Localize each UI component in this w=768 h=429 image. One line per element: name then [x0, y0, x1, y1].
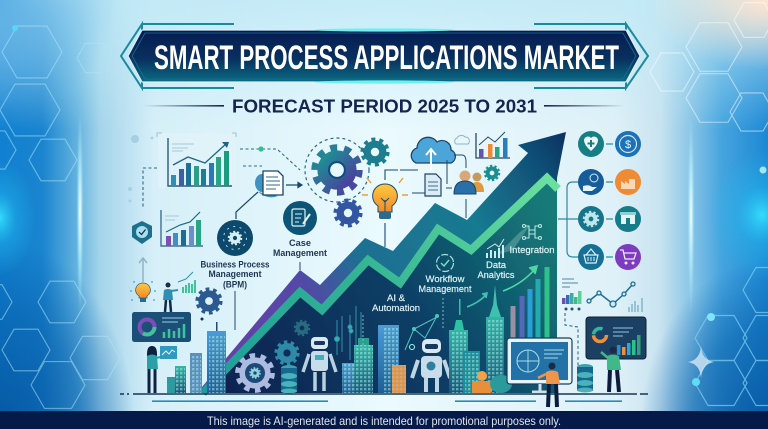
ground line: [120, 393, 648, 395]
icon: healthcare: [578, 131, 604, 157]
thin chart lines: [334, 306, 361, 360]
lower accents: [152, 400, 622, 402]
icon: cart: [615, 244, 641, 270]
arrow up left: [139, 258, 147, 282]
labels in arrow: Data: [486, 260, 507, 271]
icon: retail building: [615, 206, 641, 232]
footer disclaimer: This image is AI-generated and is intended for promotional purposes only.: [207, 414, 561, 428]
people icon: [454, 170, 484, 194]
left scene: bulb: [130, 281, 156, 302]
person green: [601, 346, 621, 392]
main growth arrow: [197, 132, 566, 393]
label: case management: [273, 238, 327, 258]
dashed link to panel: [565, 313, 578, 367]
icon: data analytics: [487, 239, 504, 258]
network lines: [405, 314, 438, 350]
dashboard panel right: [586, 317, 646, 359]
connector to BPM: [236, 192, 258, 219]
small gears and database in arrow: [276, 342, 298, 364]
chart icon top right: [476, 132, 510, 158]
database: [281, 365, 297, 394]
labels in arrow: Integration: [510, 245, 554, 256]
icon: integration: [522, 224, 542, 240]
robot two: [412, 339, 450, 392]
footer disclaimer: [0, 411, 768, 429]
doc icon center: [425, 174, 441, 196]
labels in arrow: Workflow: [426, 274, 465, 285]
city towers right: [449, 285, 504, 393]
person orange: [538, 362, 560, 407]
database right: [577, 364, 593, 392]
left scene: dashboard: [132, 312, 191, 342]
shield icon: [132, 221, 152, 244]
document icon: [255, 171, 283, 197]
small gear teal right: [485, 166, 499, 180]
robot one: [303, 337, 336, 391]
title banner: [121, 24, 648, 88]
mini chart right: [562, 279, 582, 310]
icon: settings: [578, 206, 604, 232]
connector case to arrow: [235, 262, 300, 330]
subtitle: FORECAST PERIOD 2025 TO 2031: [232, 96, 537, 116]
small gear blue: [336, 201, 360, 225]
big gear: [315, 148, 359, 192]
connectors around cloud: [400, 155, 466, 218]
icon: finance: [615, 131, 641, 157]
labels in arrow: [372, 245, 554, 314]
labels in arrow: AI &: [387, 293, 406, 304]
left scene: mini growth chart: [178, 272, 195, 293]
icon: case management: [283, 201, 317, 235]
left scene: woman: [147, 346, 165, 393]
pale bars right: [629, 298, 642, 312]
icon: services hand: [578, 169, 604, 195]
label: case management: Case: [289, 238, 311, 248]
left scene: small chart card: [160, 346, 177, 359]
icon: lightbulb: [362, 178, 408, 219]
seated person: [472, 371, 512, 393]
labels in arrow: Automation: [372, 303, 420, 314]
icon: manufacturing: [615, 169, 641, 195]
small gear teal: [363, 140, 387, 164]
dots left: [128, 135, 153, 202]
icon: finance: $: [625, 139, 631, 151]
icon: basket: [578, 244, 604, 270]
monitor: [507, 338, 572, 392]
labels in arrow: Analytics: [478, 270, 515, 281]
green trend arrows: [467, 266, 537, 307]
label: BPM: (BPM): [223, 280, 247, 290]
left scene: gear: [198, 290, 220, 312]
large bar chart top left: [157, 133, 236, 188]
dashed connectors: [143, 138, 369, 208]
connectors from bulb: [385, 170, 398, 247]
cloud icon: [411, 137, 455, 170]
label: BPM: [200, 260, 270, 290]
label: BPM: Business Process: [200, 260, 270, 270]
label: case management: Management: [273, 248, 327, 258]
left scene: buildings: [167, 322, 226, 393]
label: BPM: Management: [208, 269, 262, 279]
small cloud: [455, 135, 469, 144]
left scene: standing man: [163, 282, 178, 312]
icon: BPM: [217, 220, 253, 256]
line chart right: [587, 282, 635, 307]
bars in arrow: [510, 267, 550, 338]
connector node: [258, 146, 264, 152]
icon: workflow: [436, 254, 454, 272]
labels in arrow: Management: [418, 284, 472, 295]
city towers left in arrow: [342, 325, 406, 393]
sector connector bracket: [558, 144, 613, 257]
big gear bottom: [238, 356, 272, 390]
arrow doc to gears: [286, 182, 302, 188]
small bar chart left: [161, 210, 203, 246]
